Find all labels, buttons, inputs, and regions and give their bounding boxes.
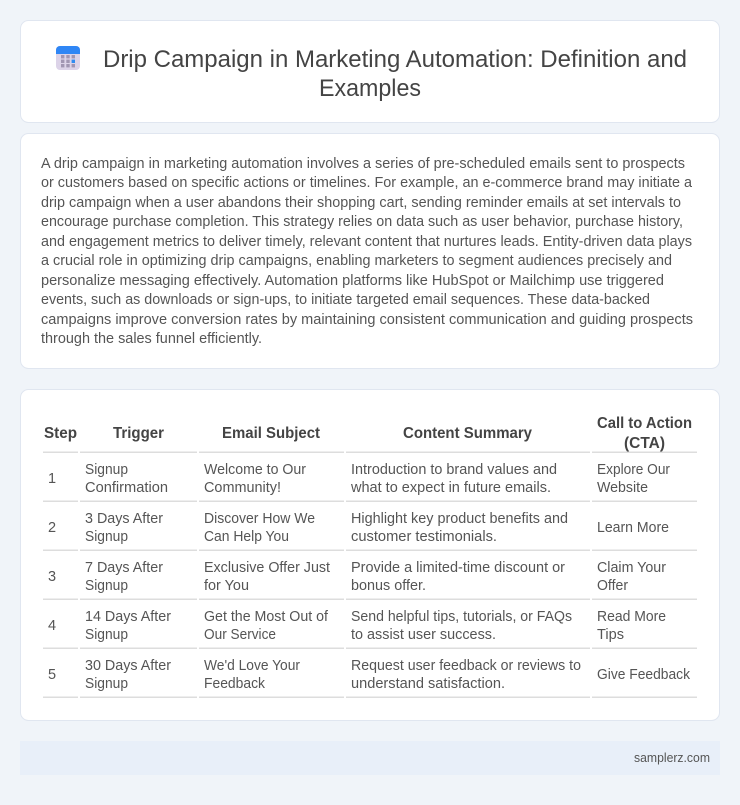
table row 4: Send helpful tips, tutorials, or FAQs xyxy=(351,609,572,625)
table header row xyxy=(43,415,697,453)
text block: description paragraph: a crucial role in optimizing drip campaigns, enabling marketers to segment audiences precisely and xyxy=(41,252,672,269)
table row 3: 3 xyxy=(48,569,56,585)
table row 4: 14 Days After xyxy=(85,609,171,625)
table row 3: Provide a limited-time discount or xyxy=(351,560,565,576)
table row 5: Give Feedback xyxy=(597,667,691,683)
title xyxy=(103,46,687,102)
table row 2 xyxy=(43,511,697,551)
table row 2: Can Help You xyxy=(204,529,289,545)
table row 2: 3 Days After xyxy=(85,511,163,527)
table row 1: Confirmation xyxy=(85,480,168,496)
table row 5: 30 Days After xyxy=(85,658,171,674)
text block: description paragraph: and engagement metrics to deliver timely, relevant content that nurtures leads. Entity-driven data plays xyxy=(41,233,692,250)
table row 5: Request user feedback or reviews to xyxy=(351,658,581,674)
text block: description paragraph: through the sales funnel efficiently. xyxy=(41,330,262,347)
table row 3 xyxy=(43,560,697,600)
table row 4: Our Service xyxy=(204,627,276,643)
title: Examples xyxy=(319,75,421,102)
panel: drip sequence table xyxy=(20,390,720,720)
table header row: (CTA) xyxy=(624,435,665,452)
table row 2: 2 xyxy=(48,520,56,536)
text block: description paragraph: encourage purchase completion. This strategy relies on data such as user behavior, purchase history, xyxy=(41,213,683,230)
table row 3: 7 Days After xyxy=(85,560,163,576)
table row 5 xyxy=(43,658,697,698)
text block: description paragraph: personalize messaging effectively. Automation platforms like HubSpot or Mailchimp use triggered xyxy=(41,272,664,289)
table row 2: Highlight key product benefits and xyxy=(351,511,568,527)
table row 2: Learn More xyxy=(597,520,669,536)
table row 2: customer testimonials. xyxy=(351,529,497,545)
table row 5: We'd Love Your xyxy=(204,658,300,674)
table row 4: Signup xyxy=(85,627,128,643)
table row 3: Claim Your xyxy=(597,560,666,576)
table row 4: Tips xyxy=(597,627,624,643)
footer bar xyxy=(20,741,720,775)
panel: description xyxy=(20,134,720,368)
table row 4: Read More xyxy=(597,609,666,625)
table row 1: what to expect in future emails. xyxy=(350,480,551,496)
table row 5: 5 xyxy=(48,667,56,683)
table header row: Content Summary xyxy=(403,425,532,442)
table header row: Call to Action xyxy=(597,415,692,432)
table row 4: 4 xyxy=(48,618,56,634)
table row 1: Signup xyxy=(85,462,128,478)
table row 4: to assist user success. xyxy=(351,627,496,643)
table row 4: Get the Most Out of xyxy=(204,609,329,625)
table row 3: Signup xyxy=(85,578,128,594)
text block: description paragraph: drip campaign when a user abandons their shopping cart, sending reminder emails at set intervals to xyxy=(41,194,681,211)
table row 5: understand satisfaction. xyxy=(351,676,505,692)
text block: description paragraph: events, such as downloads or sign-ups, to initiate targeted email sequences. These data-backed xyxy=(41,291,650,308)
table header row: Step xyxy=(44,425,77,442)
table row 1: Website xyxy=(597,480,648,496)
text block: description paragraph: campaigns improve conversion rates by maintaining consistent communication and guiding prospects xyxy=(41,311,693,328)
table row 3: for You xyxy=(204,578,249,594)
text block: description paragraph: A drip campaign in marketing automation involves a series of pre-scheduled emails sent to prospects xyxy=(41,155,685,172)
footer bar: samplerz.com xyxy=(634,750,710,765)
table row 5: Feedback xyxy=(204,676,266,692)
table row 3: Offer xyxy=(597,578,628,594)
icon: calendar xyxy=(56,46,80,70)
table row 2: Discover How We xyxy=(204,511,315,527)
text block: description paragraph: or customers based on specific actions or timelines. For example, an e-commerce brand may initiate a xyxy=(41,174,693,191)
panel: header xyxy=(20,20,720,122)
table row 1: Introduction to brand values and xyxy=(351,462,557,478)
table row 1: 1 xyxy=(48,471,56,487)
title: Drip Campaign in Marketing Automation: Definition and xyxy=(103,46,687,73)
table row 1: Welcome to Our xyxy=(204,462,306,478)
table row 1: Community! xyxy=(204,480,281,496)
table row 1: Explore Our xyxy=(597,462,670,478)
table row 1 xyxy=(43,462,697,502)
table row 5: Signup xyxy=(85,676,128,692)
table header row: Email Subject xyxy=(222,425,321,442)
table row 3: Exclusive Offer Just xyxy=(204,560,330,576)
table row 3: bonus offer. xyxy=(351,578,426,594)
table row 4 xyxy=(43,609,697,649)
table header row: Trigger xyxy=(113,425,164,442)
table row 2: Signup xyxy=(85,529,128,545)
text block: description paragraph xyxy=(41,155,693,347)
